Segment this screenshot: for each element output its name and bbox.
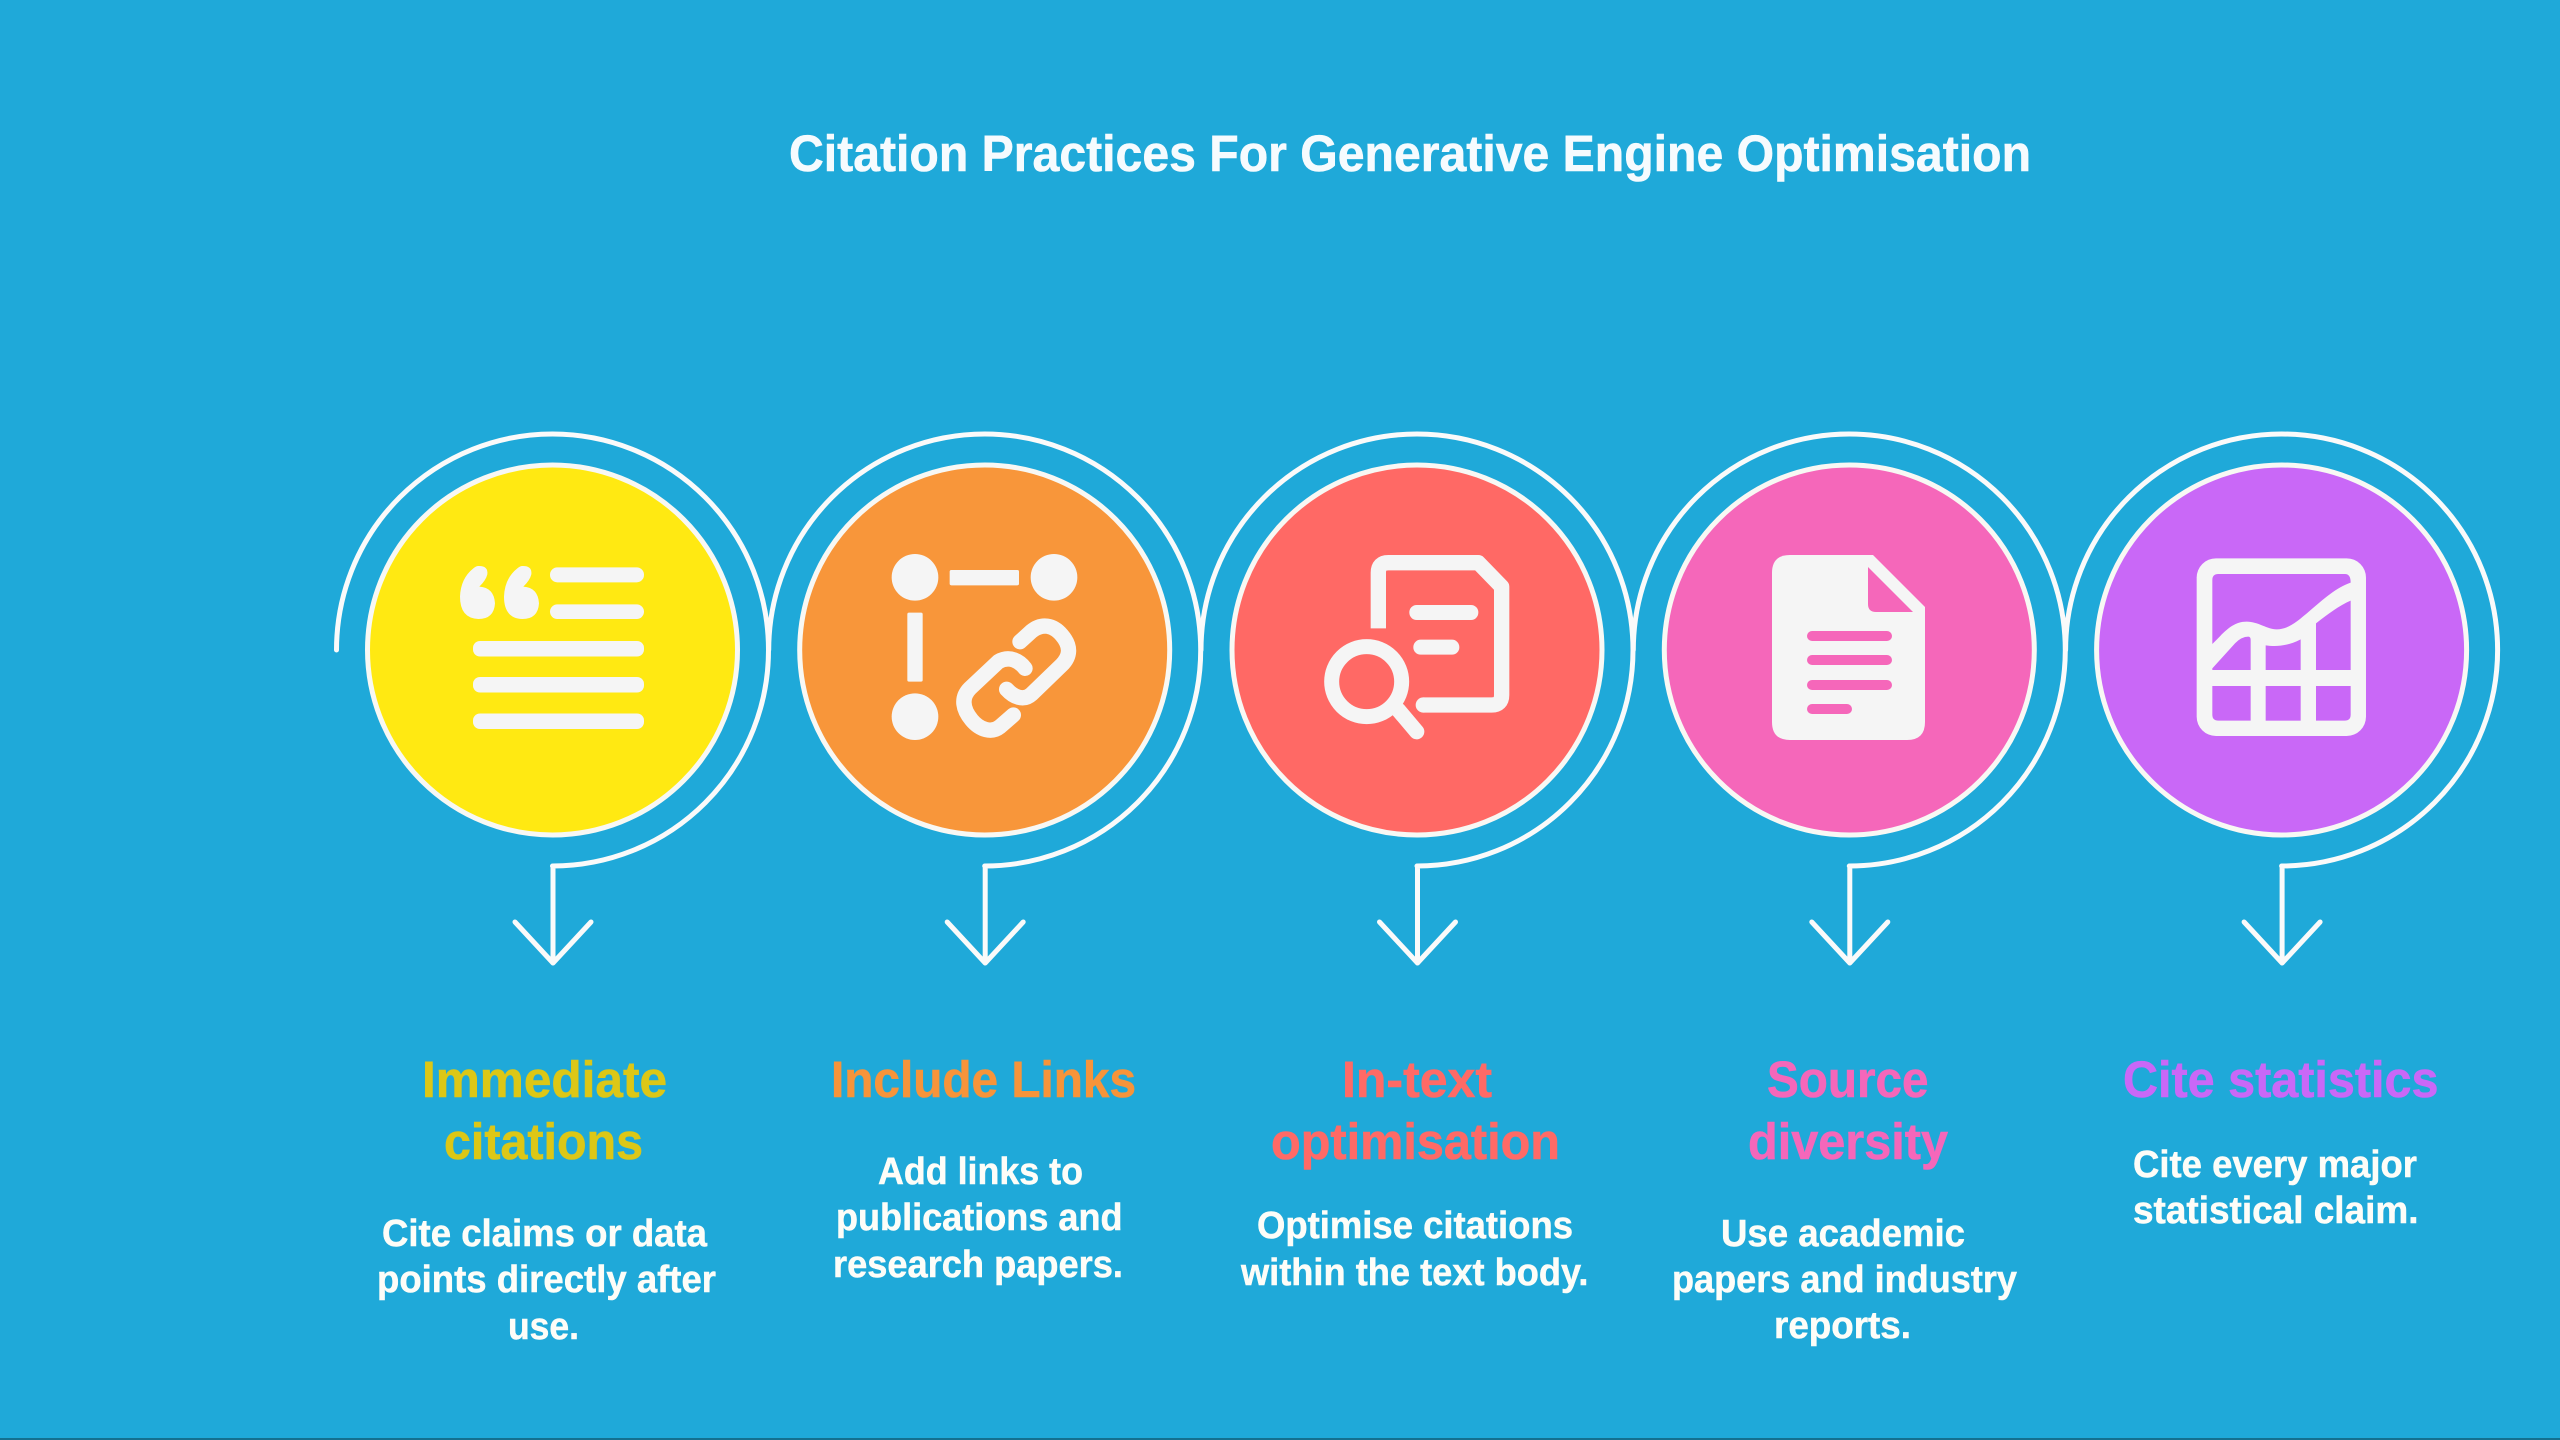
icon: quote and text lines <box>460 566 644 729</box>
heading: Source <box>1767 1051 1928 1108</box>
description <box>1672 1213 2017 1347</box>
pink circle <box>1664 465 2034 835</box>
icon: nodes and chain link <box>892 554 1077 740</box>
connector arc and arrow <box>1201 434 1633 963</box>
heading: optimisation <box>1271 1113 1560 1170</box>
red circle <box>1232 465 1602 835</box>
connector arc and arrow <box>336 434 768 963</box>
connector arc and arrow <box>1633 434 2065 963</box>
heading: Immediate <box>422 1051 667 1108</box>
connector arc and arrow <box>769 434 1201 963</box>
icon: document with magnifier <box>1332 563 1502 732</box>
description: Optimise citations <box>1257 1205 1573 1247</box>
orange circle <box>800 465 1170 835</box>
description: papers and industry <box>1672 1259 2017 1301</box>
description: publications and <box>836 1197 1122 1239</box>
heading <box>1271 1051 1560 1170</box>
heading <box>1748 1051 1949 1170</box>
icon: filled document <box>1772 555 1925 740</box>
connector arc and arrow <box>2066 434 2498 963</box>
step 3: in-text optimisation <box>1201 434 1633 1294</box>
description: Cite claims or data <box>382 1213 708 1255</box>
description: statistical claim. <box>2133 1190 2418 1232</box>
step 4: source diversity <box>1633 434 2065 1347</box>
description: use. <box>508 1306 579 1348</box>
heading: Cite statistics <box>2123 1051 2438 1108</box>
description: reports. <box>1774 1305 1911 1347</box>
icon: chart on grid <box>2197 558 2366 736</box>
heading: diversity <box>1748 1113 1949 1170</box>
description: Use academic <box>1721 1213 1965 1255</box>
step 5: cite statistics <box>2066 434 2498 1232</box>
description <box>833 1151 1123 1286</box>
description: research papers. <box>833 1244 1123 1286</box>
heading <box>422 1051 667 1170</box>
description: Add links to <box>878 1151 1083 1193</box>
heading: In-text <box>1342 1051 1492 1108</box>
step 2: include links <box>769 434 1201 1286</box>
description: Cite every major <box>2133 1144 2417 1186</box>
yellow circle <box>368 465 738 835</box>
purple circle <box>2097 465 2467 835</box>
heading: citations <box>444 1113 643 1170</box>
description: points directly after <box>377 1259 716 1301</box>
description: within the text body. <box>1240 1252 1588 1294</box>
description <box>2133 1144 2418 1232</box>
heading: Include Links <box>831 1051 1136 1108</box>
step 1: immediate citations <box>336 434 768 1348</box>
description <box>1240 1205 1588 1294</box>
description <box>377 1213 716 1348</box>
title: Citation Practices For Generative Engine Optimisation <box>789 125 2031 182</box>
